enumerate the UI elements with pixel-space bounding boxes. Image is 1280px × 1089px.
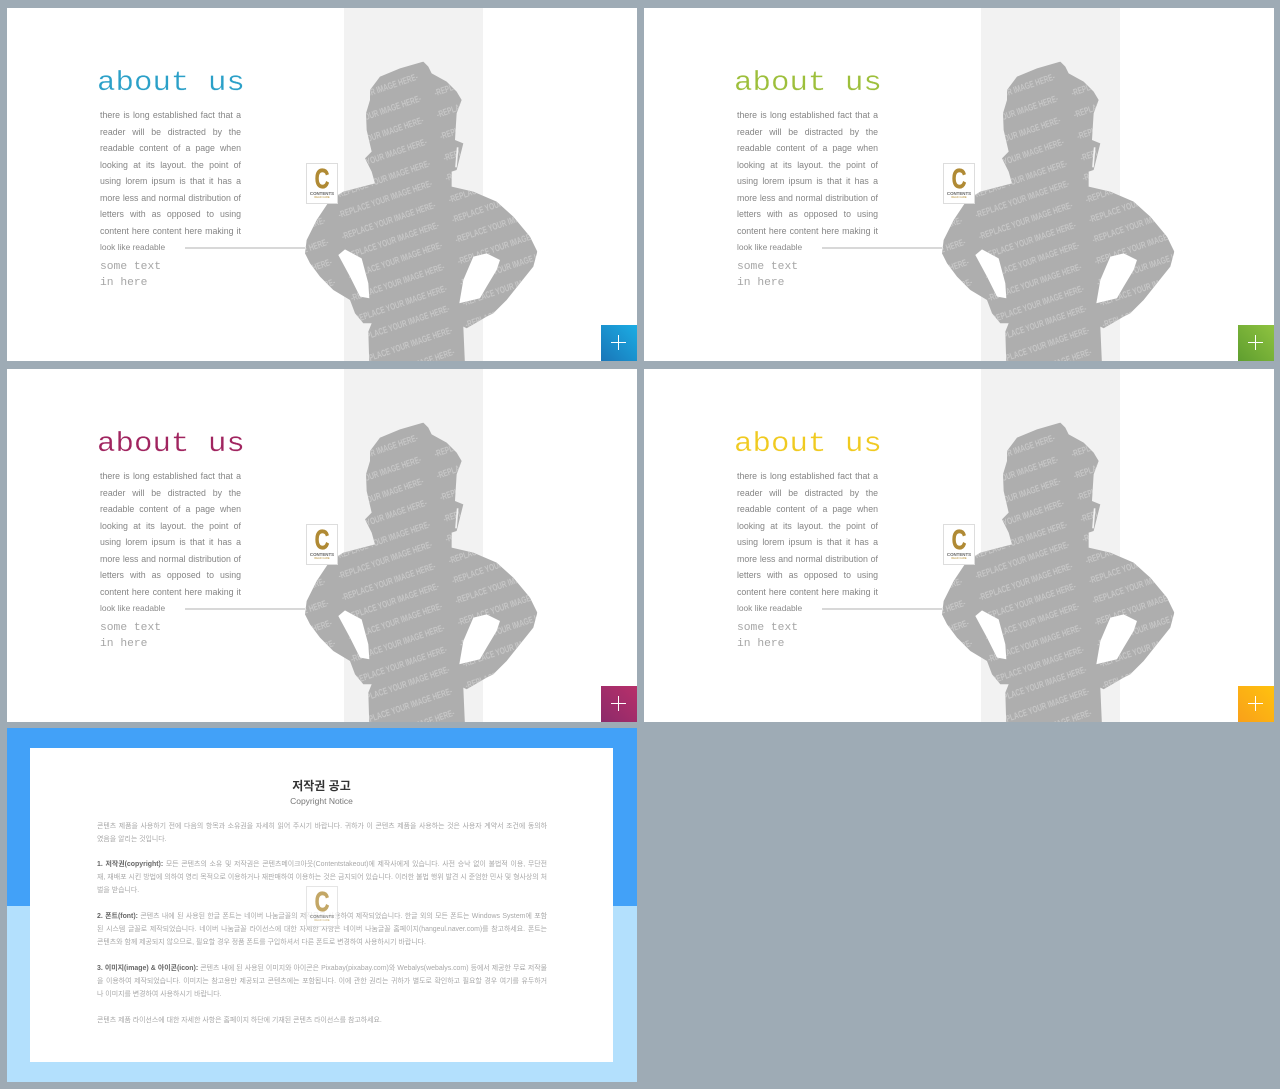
notice: font: 콘텐츠와 함께 제공되지 않으므로, 필요할 경우 정품 폰트를 구입하셔서 다른 폰트로 변경하여 사용하시기 바랍니다. — [97, 939, 426, 946]
body text: using lorem ipsum is that it has a — [737, 176, 878, 186]
logo — [306, 163, 338, 204]
silhouette placeholder — [305, 422, 538, 722]
logo: READ CARE — [314, 196, 330, 199]
body text: readable content of a page when — [100, 504, 241, 514]
notice: font: 2. 폰트(font): 콘텐츠 내에 된 사용된 한글 폰트는 네이버 나눔글꼴의 저작물로 사용하여 제작되었습니다. 한글 외의 모든 폰트는 Windows System에 포함 — [97, 913, 547, 920]
notice intro — [97, 822, 547, 843]
body text: look like readable — [737, 242, 802, 252]
caption: some text in here — [100, 261, 161, 289]
body text: content here content here making it — [100, 587, 241, 597]
body text: more less and normal distribution of — [737, 193, 878, 203]
body text — [737, 471, 878, 613]
panel: about us green — [644, 8, 1274, 361]
body text: content here content here making it — [737, 587, 878, 597]
notice: font — [97, 912, 547, 946]
body text: there is long established fact that a — [737, 471, 878, 481]
body text: reader will be distracted by the — [100, 127, 241, 137]
body text: there is long established fact that a — [737, 110, 878, 120]
logo: CONTENTS — [310, 552, 334, 557]
logo: C — [315, 163, 329, 194]
heading: about us — [734, 68, 882, 99]
body text: more less and normal distribution of — [100, 193, 241, 203]
body text: looking at its layout. the point of — [737, 160, 878, 170]
panel: about us magenta — [7, 369, 637, 722]
body text: look like readable — [100, 242, 165, 252]
body text: reader will be distracted by the — [737, 127, 878, 137]
notice: font: 된 시스템 글꼴로 제작되었습니다. 네이버 나눔글꼴 라이선스에 대한 자세한 사항은 네이버 나눔글꼴 홈페이지(hangeul.naver.com)를 참고하세요. 폰트는 — [97, 926, 547, 933]
body text: looking at its layout. the point of — [100, 160, 241, 170]
body text: more less and normal distribution of — [737, 554, 878, 564]
notice: copyright: 1. 저작권(copyright): 모든 콘텐츠의 소유 및 저작권은 콘텐츠메이크아웃(Contentstakeout)에 제작사에게 있습니다. 사전 승낙 없이 불법적 이용, 무단전 — [97, 861, 547, 868]
body text: letters with as opposed to using — [100, 570, 241, 580]
pointer line — [185, 247, 305, 249]
plus button — [601, 325, 637, 361]
silhouette placeholder — [942, 422, 1174, 722]
logo on notice: C — [315, 886, 329, 917]
silhouette placeholder — [305, 62, 538, 361]
notice intro: 콘텐츠 제품을 사용하기 전에 다음의 항목과 소유권을 자세히 읽어 주시기 바랍니다. 귀하가 이 콘텐츠 제품을 사용하는 것은 사용자 계약서 조건에 동의하 — [97, 823, 547, 830]
notice: copyright: 벌을 받습니다. — [97, 887, 139, 894]
notice subtitle: Copyright Notice — [290, 796, 353, 806]
body text: content here content here making it — [737, 226, 878, 236]
logo: READ CARE — [951, 557, 967, 560]
notice: image and icon: 3. 이미지(image) & 아이콘(icon): 콘텐츠 내에 된 사용된 이미지와 아이콘은 Pixabay(pixabay.com)와 Webalys(webalys.com) 등에서 제공한 무료 저작물 — [97, 965, 547, 972]
heading: about us — [97, 68, 245, 99]
body text: letters with as opposed to using — [100, 209, 241, 219]
logo: C — [952, 524, 966, 555]
body text: reader will be distracted by the — [737, 488, 878, 498]
caption: some text in here — [737, 261, 798, 289]
logo: READ CARE — [951, 196, 967, 199]
logo: C — [952, 163, 966, 194]
logo: CONTENTS — [947, 191, 971, 196]
logo — [306, 524, 338, 565]
notice: image and icon: 을 이용하여 제작되었습니다. 이미지는 참고용만 제공되고 콘텐츠에는 포함됩니다. 이에 관한 권리는 귀하가 별도로 확인하고 필요할 경우 여기를 유두하거 — [97, 978, 547, 985]
pointer line — [185, 608, 305, 610]
body text: looking at its layout. the point of — [737, 521, 878, 531]
body text: readable content of a page when — [737, 504, 878, 514]
body text — [100, 110, 241, 252]
notice title: 저작권 공고 — [292, 779, 351, 793]
body text — [100, 471, 241, 613]
body text: reader will be distracted by the — [100, 488, 241, 498]
notice intro: 였음을 알리는 것입니다. — [97, 836, 167, 843]
body text: looking at its layout. the point of — [100, 521, 241, 531]
logo on notice — [306, 886, 338, 927]
pointer line — [822, 247, 942, 249]
plus button — [1238, 325, 1274, 361]
panel: copyright notice — [7, 728, 637, 1082]
logo — [943, 163, 975, 204]
plus button — [601, 686, 637, 722]
panel: about us blue — [7, 8, 637, 361]
heading: about us — [734, 429, 882, 460]
logo: CONTENTS — [310, 191, 334, 196]
body text: letters with as opposed to using — [737, 570, 878, 580]
caption: some text in here — [100, 622, 161, 650]
heading: about us — [97, 429, 245, 460]
logo: C — [315, 524, 329, 555]
plus button — [1238, 686, 1274, 722]
body text — [737, 110, 878, 252]
notice closing line: 콘텐츠 제품 라이선스에 대한 자세한 사항은 홈페이지 하단에 기재된 콘텐츠 라이선스를 참고하세요. — [97, 1017, 382, 1024]
body text: using lorem ipsum is that it has a — [737, 537, 878, 547]
body text: using lorem ipsum is that it has a — [100, 537, 241, 547]
panel: about us yellow — [644, 369, 1274, 722]
body text: there is long established fact that a — [100, 110, 241, 120]
logo: CONTENTS — [947, 552, 971, 557]
logo on notice: READ CARE — [314, 919, 330, 922]
pointer line — [822, 608, 942, 610]
body text: look like readable — [737, 603, 802, 613]
body text: there is long established fact that a — [100, 471, 241, 481]
body text: using lorem ipsum is that it has a — [100, 176, 241, 186]
notice: copyright — [97, 860, 547, 894]
body text: look like readable — [100, 603, 165, 613]
notice: copyright: 재, 재배포 시킨 방법에 의하여 영리 목적으로 이용하거나 재판매하여 이용하는 것은 금지되어 있습니다. 이러한 불법 행위 발견 시 준엄한 민사 및 형사상의 처 — [97, 874, 547, 881]
logo: READ CARE — [314, 557, 330, 560]
body text: readable content of a page when — [100, 143, 241, 153]
body text: content here content here making it — [100, 226, 241, 236]
silhouette placeholder — [942, 62, 1174, 361]
body text: readable content of a page when — [737, 143, 878, 153]
caption: some text in here — [737, 622, 798, 650]
notice sheet — [30, 748, 613, 1062]
logo — [943, 524, 975, 565]
notice: image and icon: 나 이미지를 변경하여 사용하시기 바랍니다. — [97, 991, 222, 998]
body text: more less and normal distribution of — [100, 554, 241, 564]
notice: image and icon — [97, 964, 547, 998]
body text: letters with as opposed to using — [737, 209, 878, 219]
logo on notice: CONTENTS — [310, 914, 334, 919]
